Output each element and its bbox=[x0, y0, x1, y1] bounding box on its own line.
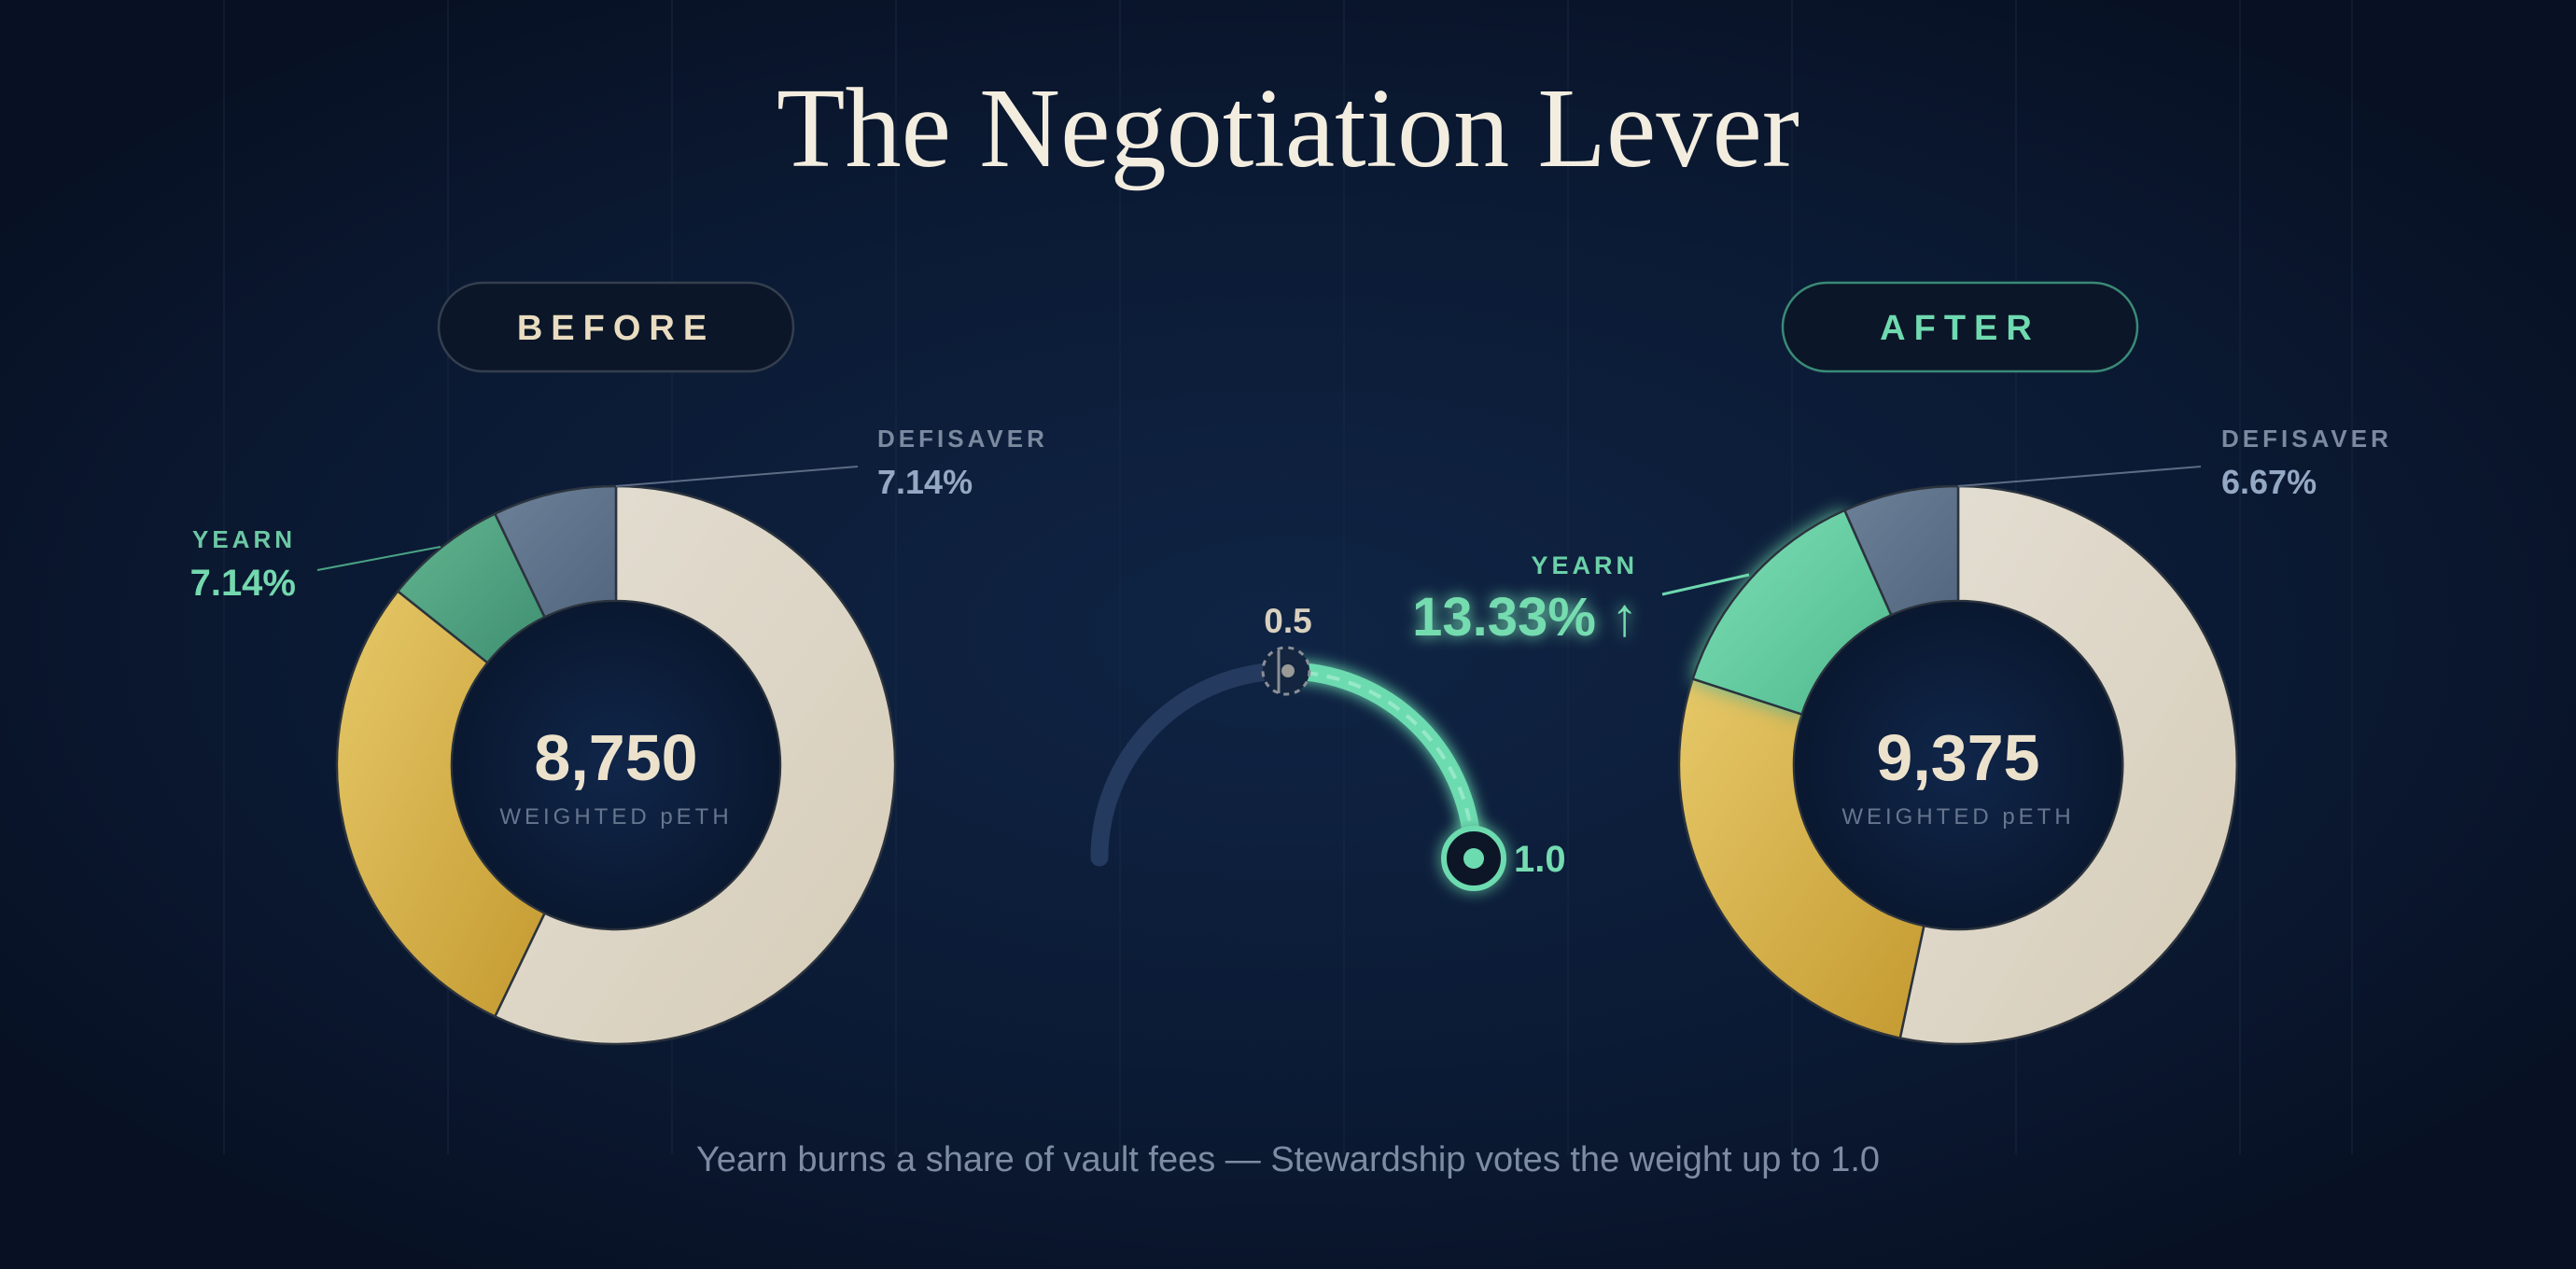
label: yearn after bbox=[1412, 551, 1749, 648]
footer caption: Yearn burns a share of vault fees — Stewardship votes the weight up to 1.0 bbox=[696, 1140, 1880, 1179]
marker: 0.5: 0.5 bbox=[1264, 602, 1312, 640]
label: yearn after: YEARN bbox=[1531, 551, 1638, 579]
label: defisaver before: DEFISAVER bbox=[877, 425, 1048, 453]
label: defisaver after bbox=[1958, 425, 2392, 501]
marker: 0.5 bbox=[1263, 602, 1312, 694]
center value: after: WEIGHTED pETH bbox=[1841, 804, 2075, 830]
marker: 1.0 bbox=[1444, 829, 1566, 888]
center value: before bbox=[499, 721, 733, 830]
label: defisaver after: DEFISAVER bbox=[2221, 425, 2392, 453]
label: yearn before bbox=[190, 525, 441, 604]
marker: 1.0: 1.0 bbox=[1514, 839, 1566, 880]
label: yearn before: 7.14% bbox=[190, 563, 296, 604]
donut: after bbox=[1679, 486, 2237, 1044]
center value: after: 9,375 bbox=[1876, 721, 2040, 794]
center value: after bbox=[1841, 721, 2075, 830]
label: defisaver after: 6.67% bbox=[2221, 463, 2317, 501]
label: yearn after: 13.33% ↑ bbox=[1412, 587, 1638, 648]
center value: before: 8,750 bbox=[534, 721, 698, 794]
gauge: weight lever bbox=[1099, 602, 1566, 888]
title: The Negotiation Lever bbox=[777, 65, 1799, 191]
pill: before bbox=[439, 283, 793, 371]
pill: before: BEFORE bbox=[517, 309, 715, 348]
pill: after bbox=[1783, 283, 2137, 371]
label: defisaver before bbox=[616, 425, 1048, 501]
label: yearn before: YEARN bbox=[192, 525, 296, 553]
pill: after: AFTER bbox=[1880, 309, 2040, 348]
label: defisaver before: 7.14% bbox=[877, 463, 973, 501]
donut: before bbox=[337, 486, 895, 1044]
center value: before: WEIGHTED pETH bbox=[499, 804, 733, 830]
